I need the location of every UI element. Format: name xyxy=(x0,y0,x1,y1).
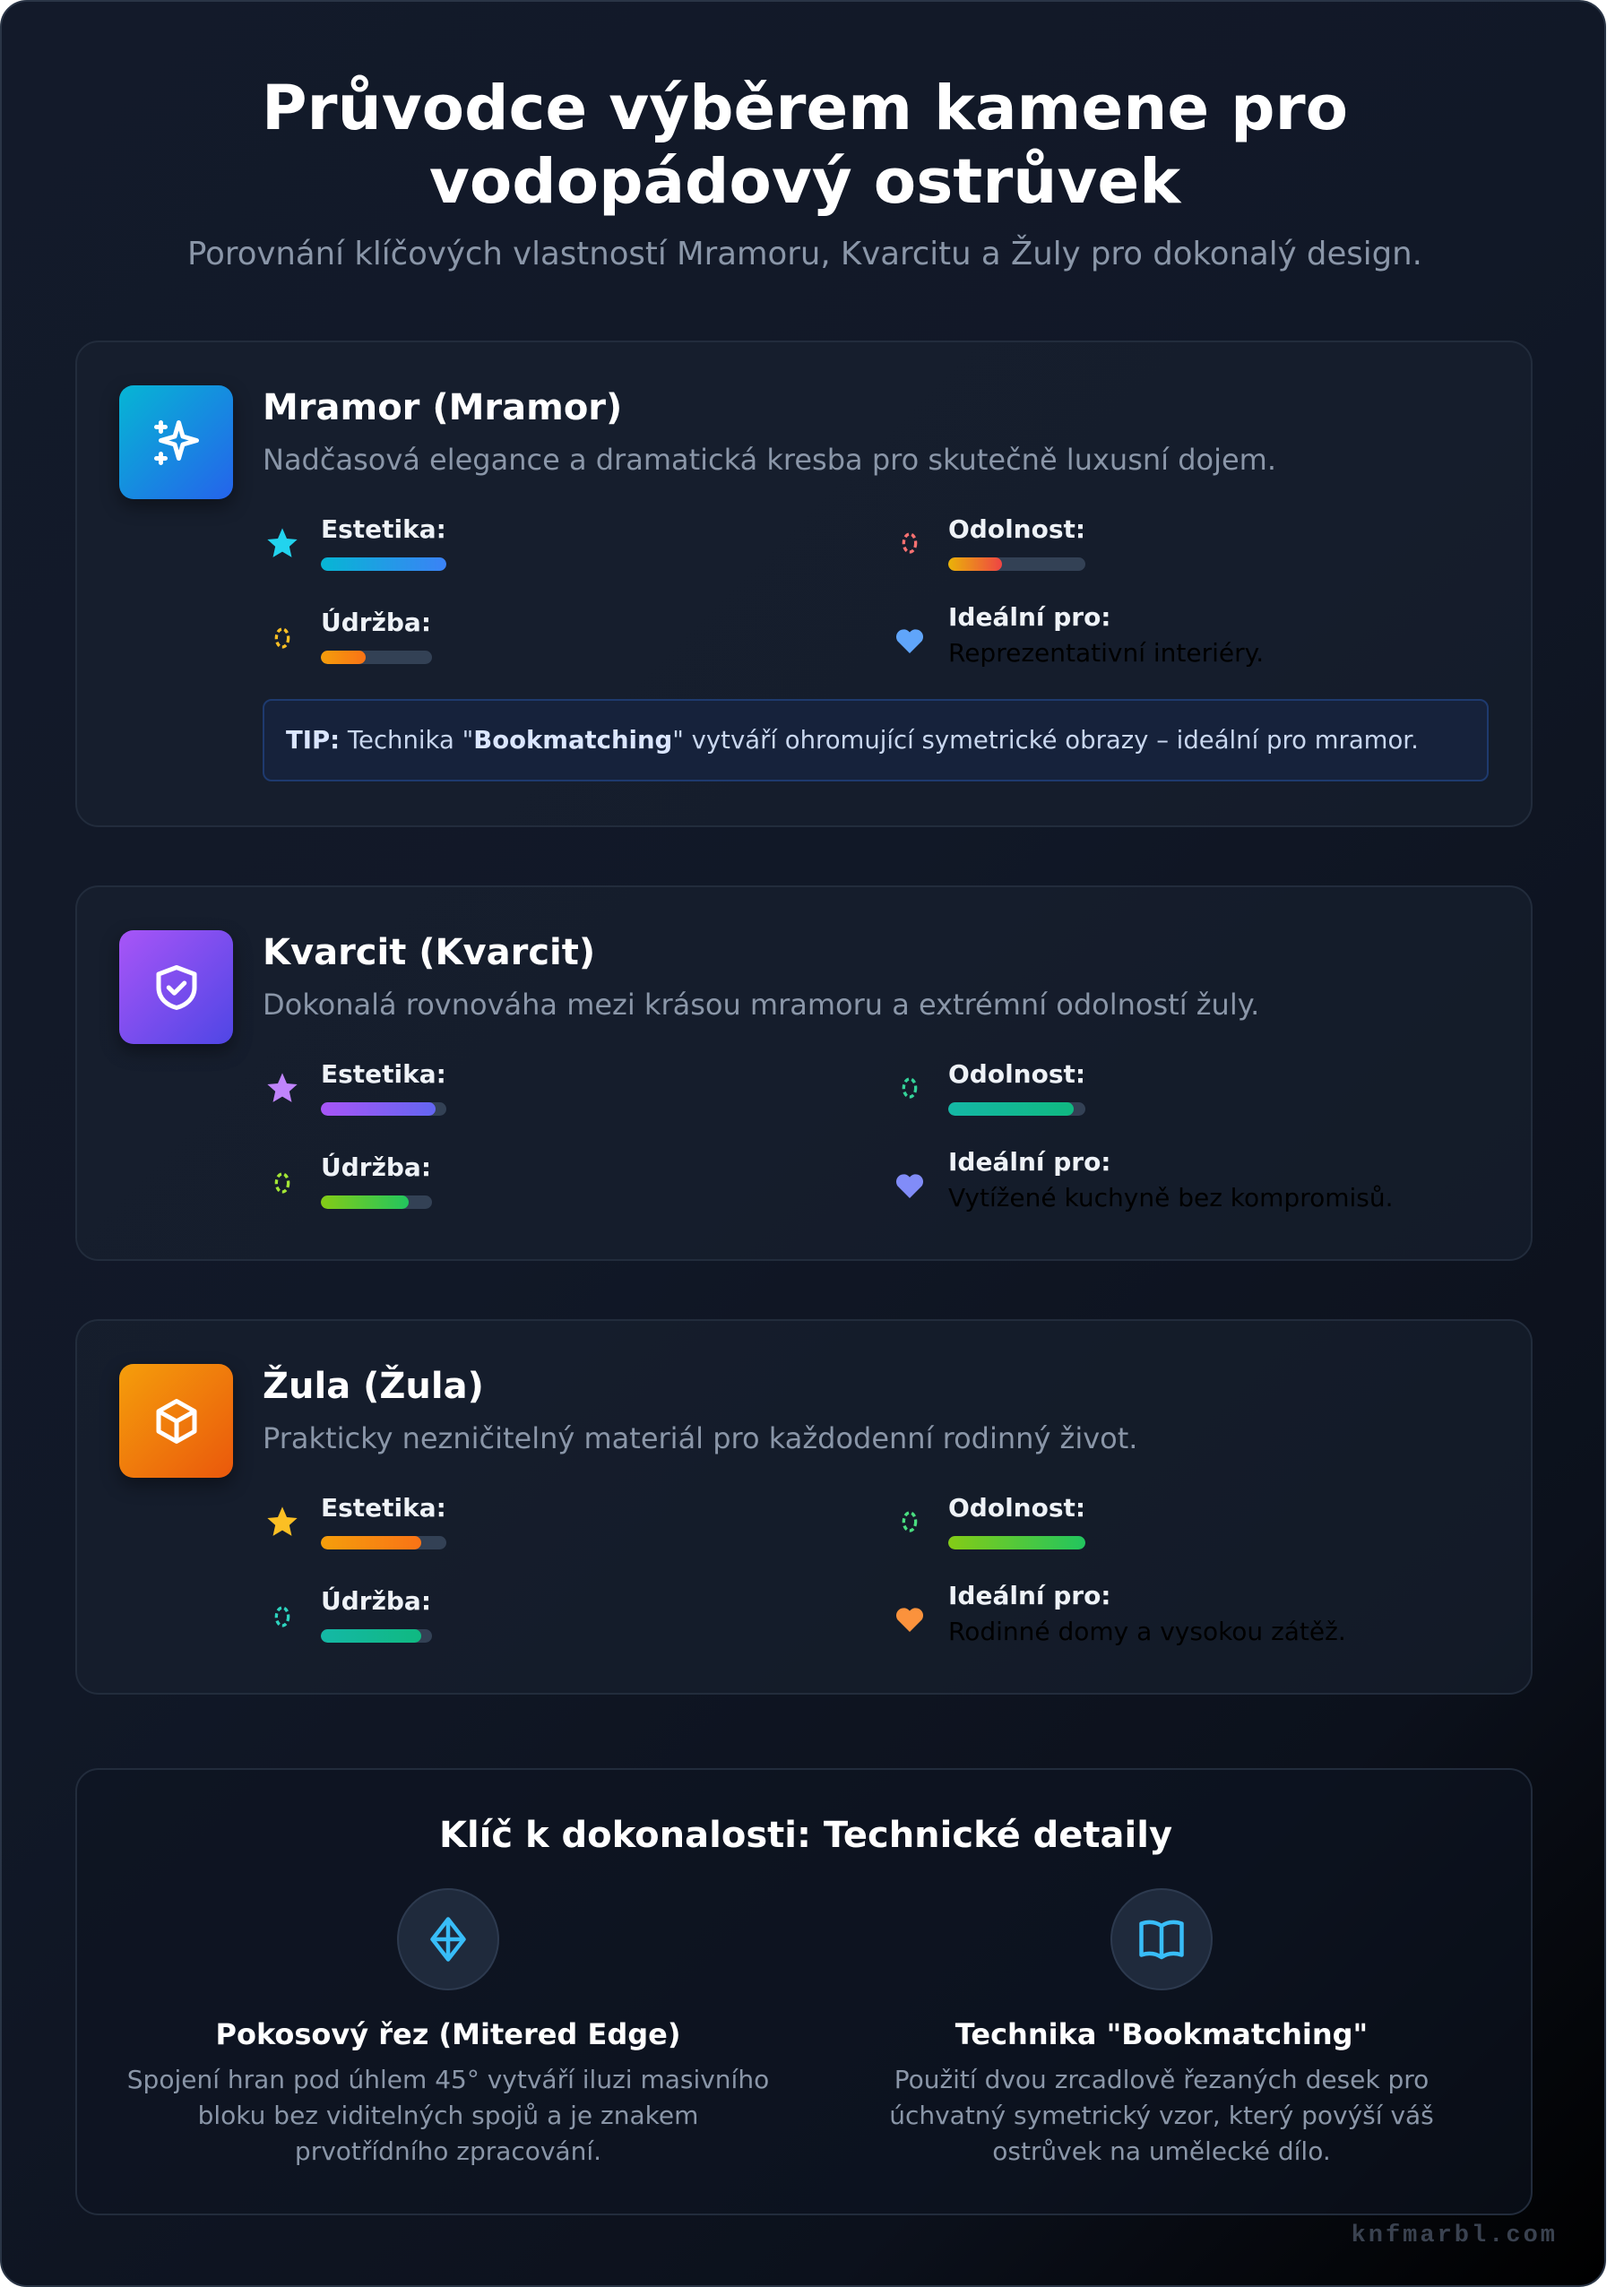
metric: Údržba xyxy=(274,1152,432,1209)
item: bookmatching xyxy=(889,1888,1434,2166)
metric: Estetika: Estetika: xyxy=(321,1059,446,1089)
metric: Estetika xyxy=(267,514,446,571)
item: bookmatching: Technika "Bookmatching" xyxy=(955,2017,1368,2051)
metric: Údržba xyxy=(274,1586,432,1643)
item: mitered edge: prvotřídního zpracování. xyxy=(295,2136,601,2166)
item: mitered edge: Spojení hran pod úhlem 45° vytváří iluzi masivního xyxy=(127,2065,769,2094)
subtitle: Porovnání klíčových vlastností Mramoru, Kvarcitu a Žuly pro dokonalý design. xyxy=(187,236,1422,272)
icon: cube xyxy=(119,1364,233,1478)
metric: Ideální pro xyxy=(896,1147,1394,1213)
callout: tip xyxy=(263,699,1489,781)
item: bookmatching: Použití dvou zrcadlově řezaných desek pro xyxy=(894,2065,1429,2094)
description: Prakticky nezničitelný materiál pro každodenní rodinný život. xyxy=(263,1421,1137,1455)
metric: Ideální pro: Vytížené kuchyně bez kompromisů. xyxy=(948,1183,1394,1213)
heading: Kvarcit (Kvarcit) xyxy=(263,932,595,973)
item: bookmatching: úchvatný symetrický vzor, který povýší váš xyxy=(889,2101,1434,2130)
title: vodopádový ostrůvek xyxy=(429,146,1180,218)
icon: sparkles xyxy=(119,385,233,499)
item: mitered edge: bloku bez viditelných spojů a je znakem xyxy=(198,2101,698,2130)
panel: Kvarcit xyxy=(75,885,1533,1261)
metric: Estetika xyxy=(267,1493,446,1549)
metric: Ideální pro: Reprezentativní interiéry. xyxy=(948,638,1264,668)
metric: Odolnost: Odolnost: xyxy=(948,1493,1085,1523)
title: Průvodce výběrem kamene pro xyxy=(262,73,1348,144)
heading: Mramor (Mramor) xyxy=(263,387,622,428)
panel: Mramor xyxy=(75,341,1533,827)
metric: Estetika xyxy=(267,1059,446,1116)
metric: Odolnost xyxy=(902,1493,1085,1549)
metric: Estetika: Estetika: xyxy=(321,514,446,544)
metric: Odolnost xyxy=(902,1059,1085,1116)
icon: shield xyxy=(119,930,233,1044)
title xyxy=(262,73,1348,218)
callout: tip: TIP: Technika "Bookmatching" vytváří ohromující symetrické obrazy – ideální pro mramor. xyxy=(286,726,1419,755)
metric: Údržba: Údržba: xyxy=(321,608,431,637)
item: bookmatching: ostrůvek na umělecké dílo. xyxy=(992,2136,1331,2166)
icon: book xyxy=(1110,1888,1213,1990)
description: Nadčasová elegance a dramatická kresba pro skutečně luxusní dojem. xyxy=(263,443,1276,477)
metric: Ideální pro: Ideální pro: xyxy=(948,1147,1111,1177)
metric: Odolnost: Odolnost: xyxy=(948,514,1085,544)
metric: Odolnost: Odolnost: xyxy=(948,1059,1085,1089)
item: mitered edge xyxy=(127,1888,769,2166)
metric: Údržba: Údržba: xyxy=(321,1586,431,1616)
metric: Ideální pro: Ideální pro: xyxy=(948,1581,1111,1610)
icon: diamond xyxy=(397,1888,499,1990)
metric: Estetika: Estetika: xyxy=(321,1493,446,1523)
metric: Ideální pro xyxy=(896,1581,1346,1646)
description: Dokonalá rovnováha mezi krásou mramoru a extrémní odolností žuly. xyxy=(263,988,1259,1022)
metric: Ideální pro: Rodinné domy a vysokou zátěž. xyxy=(948,1617,1346,1646)
item: mitered edge: Pokosový řez (Mitered Edge) xyxy=(216,2017,680,2051)
metric: Ideální pro: Ideální pro: xyxy=(948,602,1111,632)
metric: Odolnost xyxy=(902,514,1085,571)
panel: technical details xyxy=(75,1768,1533,2215)
watermark: knfmarbl.com xyxy=(1352,2222,1558,2249)
metric: Ideální pro xyxy=(896,602,1264,668)
heading: Žula (Žula) xyxy=(263,1366,484,1407)
metric: Údržba xyxy=(274,608,432,664)
panel: Žula xyxy=(75,1319,1533,1695)
metric: Údržba: Údržba: xyxy=(321,1152,431,1182)
heading: Klíč k dokonalosti: Technické detaily xyxy=(439,1815,1172,1856)
